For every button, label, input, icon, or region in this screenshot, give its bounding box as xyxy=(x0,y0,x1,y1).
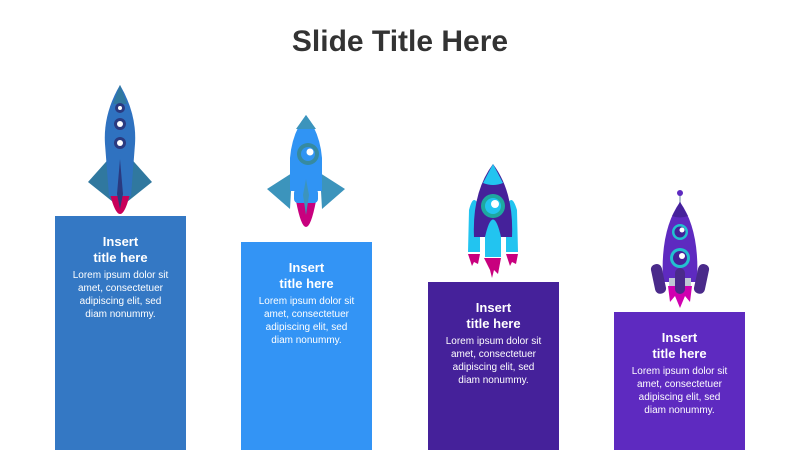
bar 2: title here xyxy=(279,276,334,291)
bar 4: title here xyxy=(652,346,707,361)
icon: rocket 2 xyxy=(267,115,345,227)
bar 2: Insert xyxy=(289,260,324,275)
icon: rocket 3 xyxy=(468,164,518,278)
bar 1: title here xyxy=(93,250,148,265)
bar 2: Lorem ipsum dolor sit amet, consectetuer adipiscing elit, sed diam nonummy. xyxy=(259,296,354,346)
title: Slide Title Here xyxy=(292,25,508,58)
bar 1: Lorem ipsum dolor sit amet, consectetuer adipiscing elit, sed diam nonummy. xyxy=(73,270,168,320)
bar 3 xyxy=(428,282,559,450)
icon: rocket 4 xyxy=(650,190,710,308)
icon: rocket 1 xyxy=(88,85,152,214)
bar 3: Insert xyxy=(476,300,511,315)
bar 3: Lorem ipsum dolor sit amet, consectetuer adipiscing elit, sed diam nonummy. xyxy=(446,336,541,386)
bar 1: Insert xyxy=(103,234,138,249)
bar 4 xyxy=(614,312,745,450)
bar 4: Insert xyxy=(662,330,697,345)
bar 1 xyxy=(55,216,186,450)
bar 4: Lorem ipsum dolor sit amet, consectetuer adipiscing elit, sed diam nonummy. xyxy=(632,366,727,416)
bar 3: title here xyxy=(466,316,521,331)
bar 2 xyxy=(241,242,372,450)
